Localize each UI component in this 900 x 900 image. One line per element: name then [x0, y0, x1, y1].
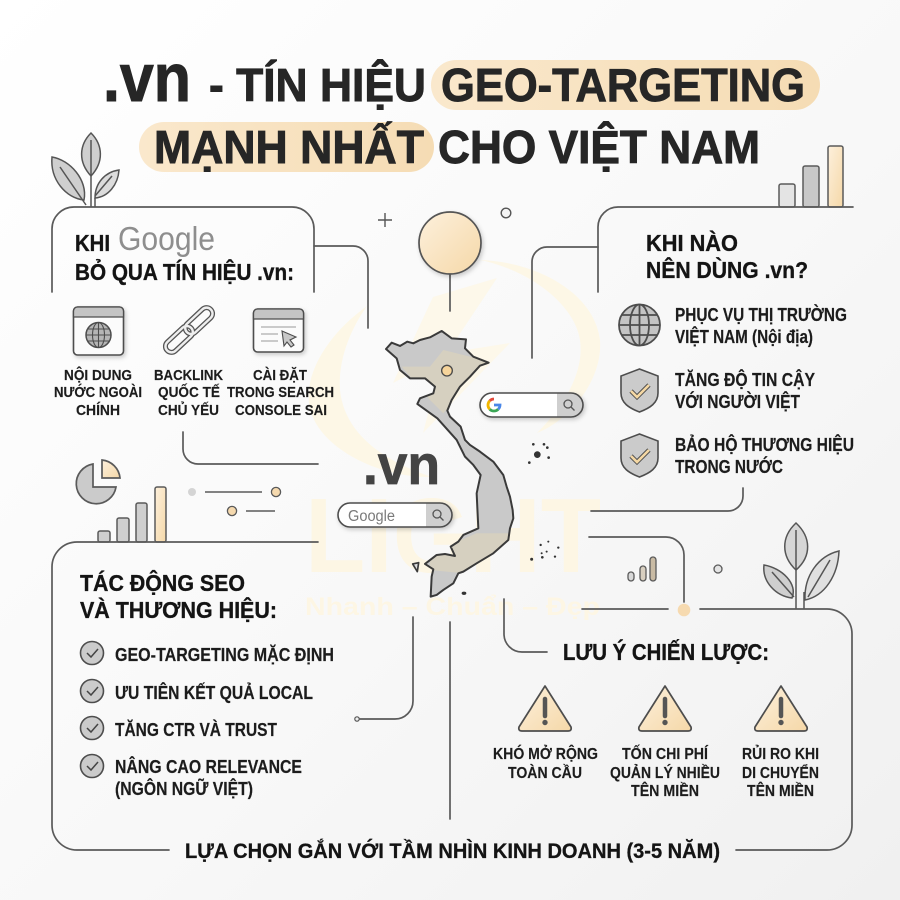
title line two: CHO VIỆT NAM: [438, 121, 760, 173]
label: international backlinks: QUỐC TẾ: [158, 383, 220, 401]
icon: pie chart: [76, 460, 120, 504]
decoration: plus sign: [378, 213, 392, 227]
heading line two: BỎ QUA TÍN HIỆU .vn:: [75, 257, 294, 285]
item: brand protection: [675, 434, 854, 477]
label: hard to expand globally: TOÀN CẦU: [508, 765, 582, 782]
item: relevance: (NGÔN NGỮ VIỆT): [115, 778, 253, 799]
panel: Google ignores .vn signal: [52, 207, 334, 419]
label: search console settings: CONSOLE SAI: [235, 403, 327, 419]
icon: magnifier: [433, 510, 444, 520]
watermark: LIGHT logo: LIGHT: [305, 477, 601, 595]
search bar label: Google: [348, 508, 395, 525]
label: search console settings: [227, 367, 334, 419]
panel: strategic notes: [493, 604, 852, 850]
title highlight pill: GEO-TARGETING: [431, 60, 820, 110]
label: domain migration risk: [742, 745, 819, 800]
label: foreign content: NƯỚC NGOÀI: [54, 383, 142, 401]
icon: browser cursor: [254, 309, 304, 352]
item: default geo-targeting: GEO-TARGETING MẶC ĐỊNH: [115, 644, 334, 665]
map of Vietnam: [386, 331, 559, 597]
icon: warning triangle 3: [755, 686, 807, 731]
item: trust: TĂNG ĐỘ TIN CẬY: [675, 369, 815, 390]
item: CTR and trust: TĂNG CTR VÀ TRUST: [115, 719, 277, 740]
label: domain migration risk: RỦI RO KHI: [742, 745, 819, 763]
map marker: Hanoi: [442, 365, 452, 376]
watermark: LIGHT logo: [305, 260, 601, 621]
label: domain management cost: TÊN MIỀN: [631, 782, 699, 800]
item: serve Vietnam market: PHỤC VỤ THỊ TRƯỜNG: [675, 304, 847, 325]
heading: NÊN DÙNG .vn?: [646, 256, 808, 283]
item: local results: ƯU TIÊN KẾT QUẢ LOCAL: [115, 682, 313, 703]
label: international backlinks: [154, 368, 223, 419]
icon: shield check: [621, 434, 658, 477]
title highlight pill: MẠNH NHẤT: [139, 122, 434, 172]
label: domain migration risk: DI CHUYỂN: [742, 764, 819, 782]
panel: when to use .vn: [598, 207, 854, 477]
icon: chain link: [163, 305, 215, 355]
item: CTR and trust: [80, 716, 277, 740]
item: serve Vietnam market: [675, 304, 847, 347]
label: foreign content: NỘI DUNG: [64, 366, 132, 384]
label: foreign content: [54, 366, 142, 419]
heading: LƯU Ý CHIẾN LƯỢC:: [563, 638, 769, 665]
watermark: LIGHT logo: Nhanh – Chuẩn – Đẹp: [305, 593, 600, 621]
label: foreign content: CHÍNH: [76, 402, 120, 419]
connector dot: [355, 717, 359, 721]
item: brand protection: TRONG NƯỚC: [675, 456, 783, 477]
title: [103, 40, 820, 173]
title GEO-TARGETING: GEO-TARGETING: [441, 59, 805, 111]
islands: Hoang Sa: [528, 443, 550, 464]
decoration: small circle: [501, 208, 511, 218]
item: trust: [675, 369, 815, 412]
item: default geo-targeting: [80, 642, 334, 665]
connector dot: gold: [678, 604, 690, 616]
item: brand protection: BẢO HỘ THƯƠNG HIỆU: [675, 434, 854, 455]
search bar: Google wordmark: [338, 503, 452, 527]
icon: magnifier: [564, 400, 574, 410]
heading: TÁC ĐỘNG SEO: [80, 569, 245, 596]
icon: gold circle: [419, 212, 481, 274]
icon: top-left plant: [52, 133, 119, 207]
title MẠNH NHẤT: MẠNH NHẤT: [154, 121, 424, 173]
icon: shield check: [621, 369, 658, 412]
icon: Google G: [488, 399, 500, 411]
label: hard to expand globally: [493, 745, 598, 782]
label: domain management cost: [610, 745, 720, 800]
icon: bottom-right plant: [764, 523, 839, 609]
heading: VÀ THƯƠNG HIỆU:: [80, 596, 277, 623]
search bar: Google G: [480, 393, 583, 417]
label: domain migration risk: TÊN MIỀN: [747, 782, 814, 800]
item: local results: [80, 680, 313, 703]
footer statement: LỰA CHỌN GẮN VỚI TẦM NHÌN KINH DOANH (3-5 NĂM): [185, 839, 720, 863]
heading: [646, 229, 808, 283]
label: international backlinks: CHỦ YẾU: [158, 401, 219, 419]
decoration: dots and dashes: [188, 487, 281, 516]
icon: bar chart left: [98, 487, 166, 542]
item: serve Vietnam market: VIỆT NAM (Nội địa): [675, 326, 813, 347]
island: Con Dao: [462, 592, 466, 595]
label: domain management cost: QUẢN LÝ NHIỀU: [610, 764, 720, 782]
label: international backlinks: BACKLINK: [154, 368, 223, 384]
icon: warning triangle 1: [519, 686, 571, 731]
item: relevance: [80, 754, 302, 799]
item: relevance: NÂNG CAO RELEVANCE: [115, 756, 302, 777]
title .vn: .vn: [103, 40, 191, 116]
icon: browser globe: [74, 307, 124, 355]
item: trust: VỚI NGƯỜI VIỆT: [675, 391, 800, 412]
icon: signal bars: [628, 557, 656, 581]
heading: [80, 569, 277, 623]
connector lines: [183, 246, 743, 819]
panel: SEO and brand impact: [52, 542, 359, 850]
icon: bar chart top right: [779, 146, 843, 207]
heading: Google wordmark: Google: [118, 220, 215, 257]
decoration: small circle: [714, 565, 722, 573]
islands: Truong Sa: [530, 541, 559, 561]
heading: KHI NÀO: [646, 229, 738, 256]
title line one: - TÍN HIỆU: [209, 59, 426, 111]
label: search console settings: CÀI ĐẶT: [253, 367, 307, 384]
label: hard to expand globally: KHÓ MỞ RỘNG: [493, 745, 598, 763]
heading: KHI: KHI: [75, 230, 110, 256]
label: search console settings: TRONG SEARCH: [227, 385, 334, 401]
center .vn: .vn: [363, 433, 440, 496]
island: Phu Quoc: [413, 563, 419, 572]
label: domain management cost: TỐN CHI PHÍ: [622, 745, 709, 763]
icon: warning triangle 2: [639, 686, 691, 731]
icon: globe: [619, 304, 660, 346]
